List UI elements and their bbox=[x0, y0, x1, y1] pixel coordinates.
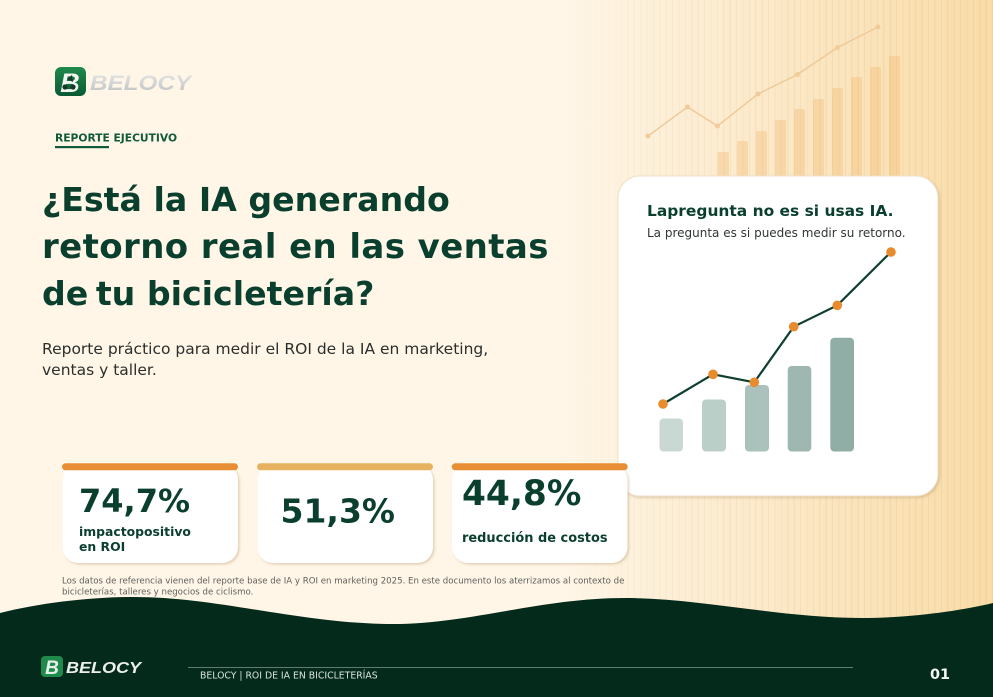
card heading: Lapregunta no es si usas IA. bbox=[647, 202, 893, 220]
KPI card: 44,8% bbox=[452, 463, 628, 563]
line chart bbox=[658, 247, 896, 409]
KPI card: 74,7%: impactopositivo bbox=[79, 524, 191, 539]
title: de tu bicicletería? bbox=[42, 274, 374, 313]
KPI card: 74,7%: en ROI bbox=[79, 539, 125, 554]
panel: chart card bbox=[618, 176, 938, 496]
logo: BELOCY footer: B bbox=[45, 658, 59, 679]
footer band bbox=[0, 597, 993, 697]
title: retorno real en las ventas bbox=[42, 227, 549, 267]
logo: BELOCY top: B bbox=[60, 68, 80, 98]
KPI card: 74,7% bbox=[62, 463, 238, 563]
decorative background chart bbox=[646, 24, 900, 178]
logo: BELOCY top bbox=[55, 67, 193, 98]
logo: BELOCY footer bbox=[41, 656, 142, 679]
source note: Los datos de referencia vienen del reporte base de IA y ROI en marketing 2025. En este documento los aterrizamos al contexto de bbox=[62, 576, 624, 586]
title bbox=[42, 180, 549, 313]
KPI card: 51,3% bbox=[257, 463, 433, 563]
logo: BELOCY top: BELOCY bbox=[90, 72, 193, 95]
subtitle bbox=[42, 340, 488, 379]
card subheading: La pregunta es si puedes medir su retorno. bbox=[647, 226, 906, 240]
KPI card: 74,7%: 74,7% bbox=[79, 482, 190, 520]
footer label: BELOCY | ROI DE IA EN BICICLETERÍAS bbox=[200, 670, 378, 682]
subtitle: ventas y taller. bbox=[42, 361, 157, 379]
subtitle: Reporte práctico para medir el ROI de la IA en marketing, bbox=[42, 340, 488, 358]
bar chart bbox=[660, 338, 854, 452]
title: ¿Está la IA generando bbox=[42, 180, 450, 219]
source note: bicicleterías, talleres y negocios de ciclismo. bbox=[62, 588, 253, 598]
source note bbox=[62, 576, 624, 598]
eyebrow: REPORTE EJECUTIVO: REPORTE EJECUTIVO bbox=[55, 132, 177, 144]
KPI card: 51,3%: 51,3% bbox=[280, 492, 395, 530]
footer rule bbox=[188, 667, 853, 668]
KPI card: 44,8%: 44,8% bbox=[462, 474, 581, 514]
logo: BELOCY footer: BELOCY bbox=[66, 660, 142, 677]
page number: 01 bbox=[930, 667, 950, 683]
KPI card: 44,8%: reducción de costos bbox=[462, 531, 608, 546]
